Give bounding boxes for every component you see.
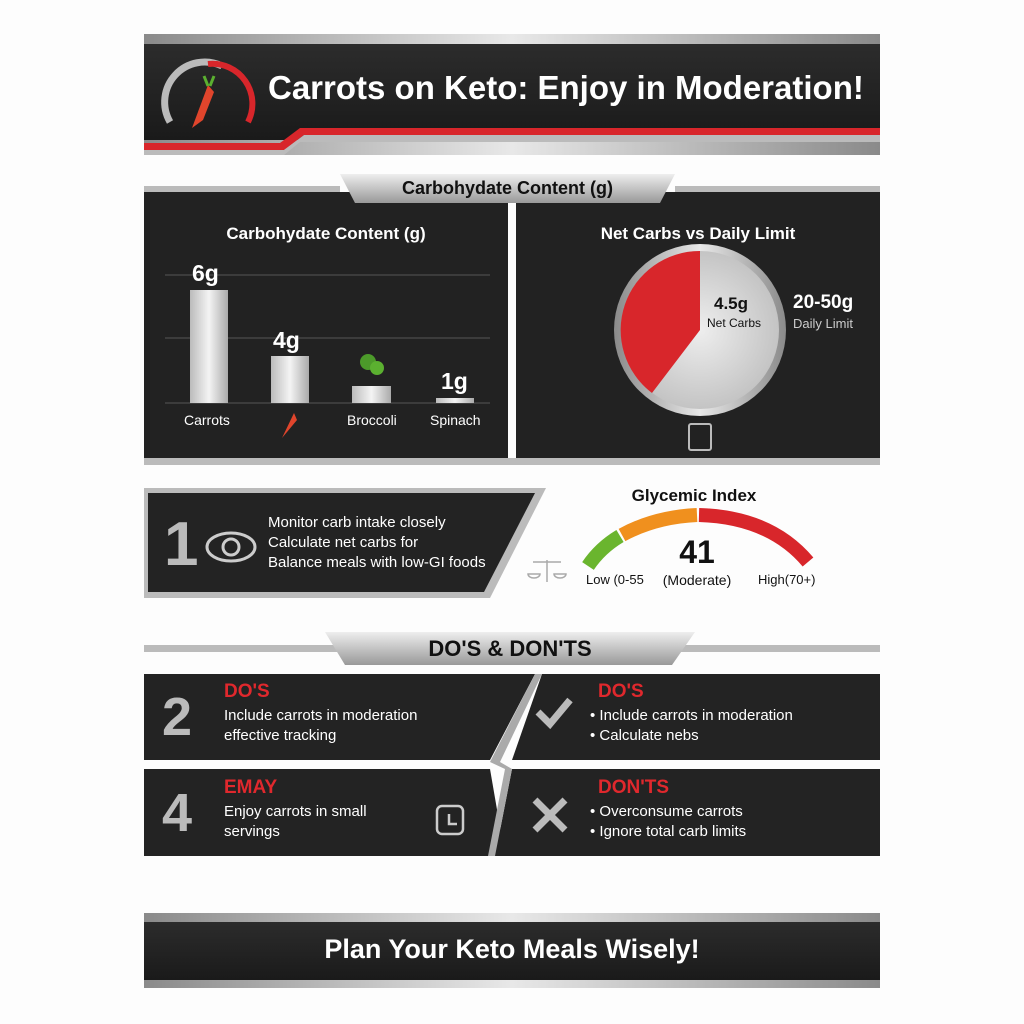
glycemic labels: Low (0-55 <box>586 572 644 587</box>
title: Carrots on Keto: Enjoy in Moderation! <box>268 69 864 106</box>
bar chart labels: Spinach <box>430 412 481 428</box>
row 4 left text: EMAY <box>224 777 277 798</box>
bar chart labels: 4g <box>273 327 300 353</box>
tip 1 text: 1 <box>164 510 198 579</box>
bar chart labels: Carbohydate Content (g) <box>226 224 426 243</box>
row 4 right text: • Ignore total carb limits <box>590 823 746 840</box>
panels: dos/donts rows <box>144 674 880 856</box>
pie chart labels: Daily Limit <box>793 316 853 331</box>
bar chart labels: Broccoli <box>347 412 397 428</box>
row 4 right text <box>590 777 746 840</box>
section tab: dos and donts <box>144 632 880 665</box>
tip 1 text: Calculate net carbs for <box>268 534 418 551</box>
footer text: Plan Your Keto Meals Wisely! <box>324 934 700 964</box>
bar chart labels: Carrots <box>184 412 230 428</box>
row 2 right text: • Include carrots in moderation <box>590 707 793 724</box>
panel: tip 1 <box>144 488 546 598</box>
pie chart labels: 4.5g <box>714 294 748 313</box>
glycemic gauge <box>588 515 808 566</box>
row 2 left text: 2 <box>162 687 192 747</box>
row 2 right text: • Calculate nebs <box>590 727 699 744</box>
glycemic labels: High(70+) <box>758 572 815 587</box>
pie chart labels: Net Carbs <box>707 316 761 330</box>
row 4 left text: servings <box>224 823 280 840</box>
icon: gauge with carrot <box>165 62 252 128</box>
bar chart labels: 1g <box>441 368 468 394</box>
row 4 right text: • Overconsume carrots <box>590 803 743 820</box>
glycemic labels: 41 <box>679 534 715 570</box>
pie chart labels: 20-50g <box>793 292 853 313</box>
icon: scale <box>528 560 566 582</box>
row 2 left text: Include carrots in moderation <box>224 707 417 724</box>
bar chart labels <box>184 224 481 428</box>
row 2 left text: effective tracking <box>224 727 336 744</box>
footer banner <box>144 913 880 988</box>
section tab: carbohydrate <box>144 174 880 203</box>
panel: pie chart <box>144 192 880 465</box>
tip 1 text: Monitor carb intake closely <box>268 514 446 531</box>
heading: carbohydrate tab: Carbohydate Content (g) <box>402 178 613 198</box>
bar chart labels: 6g <box>192 260 219 286</box>
row 4 left text <box>162 777 367 843</box>
panel: bar chart <box>144 192 508 458</box>
row 2 right text: DO'S <box>598 681 644 702</box>
heading: dos and donts: DO'S & DON'TS <box>428 636 592 661</box>
glycemic labels: Glycemic Index <box>632 486 756 505</box>
glycemic labels: (Moderate) <box>663 572 731 588</box>
row 2 right text <box>590 681 793 744</box>
tip 1 text: Balance meals with low-GI foods <box>268 554 486 571</box>
pie chart labels: Net Carbs vs Daily Limit <box>601 224 795 243</box>
glycemic labels <box>586 486 815 588</box>
row 4 left text: 4 <box>162 783 192 843</box>
header banner <box>144 34 880 155</box>
tip 1 text <box>164 510 486 579</box>
row 2 left text: DO'S <box>224 681 270 702</box>
row 4 left text: Enjoy carrots in small <box>224 803 367 820</box>
row 2 left text <box>162 681 417 747</box>
row 4 right text: DON'TS <box>598 777 669 798</box>
pie chart labels <box>601 224 853 331</box>
